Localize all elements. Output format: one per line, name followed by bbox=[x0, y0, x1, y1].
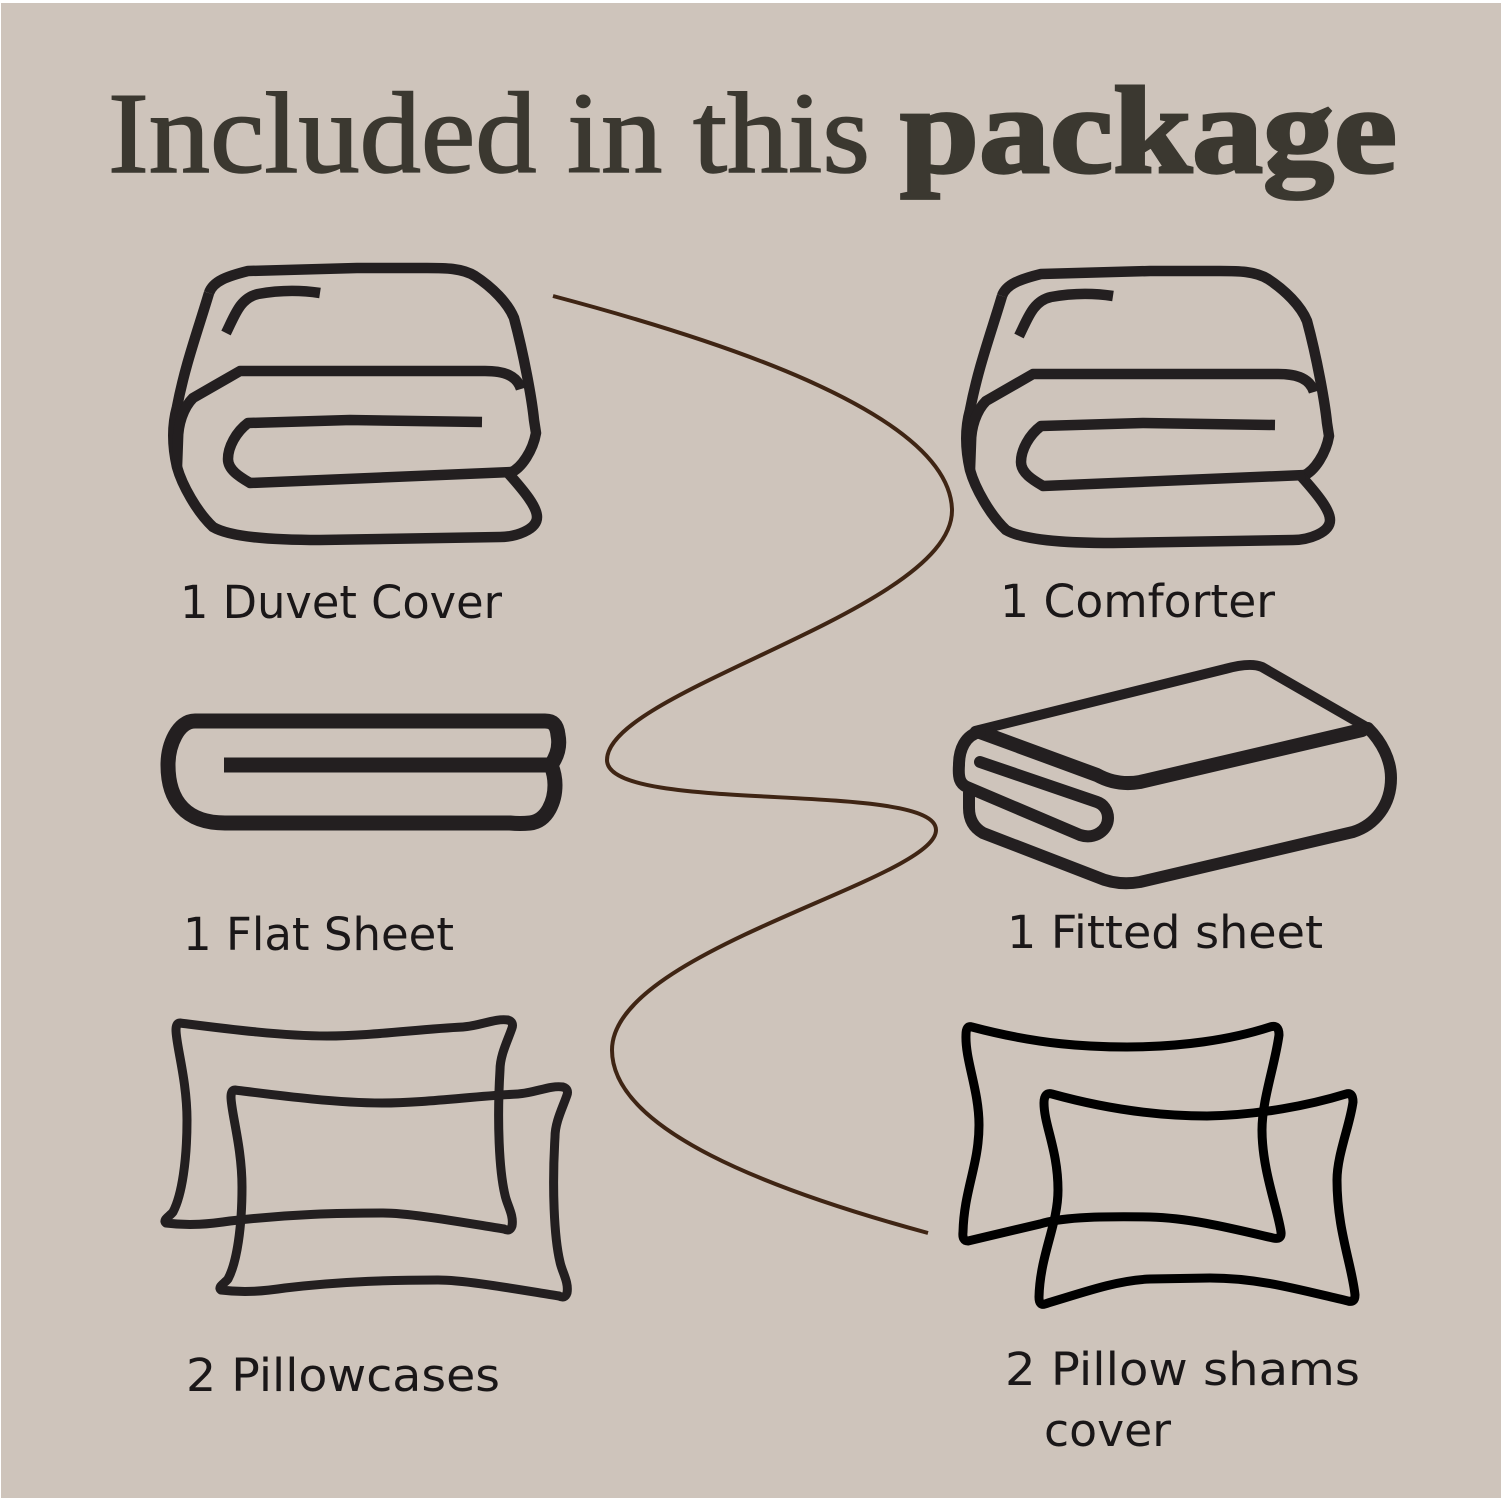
icon: pillow shams bbox=[963, 1026, 1355, 1304]
icon: fitted sheet bbox=[959, 665, 1391, 883]
title: Included in this bbox=[108, 70, 870, 198]
label: fitted sheet: 1 Fitted sheet bbox=[1007, 906, 1323, 959]
title bbox=[108, 62, 1397, 200]
label: pillow shams cover: cover bbox=[1044, 1404, 1172, 1457]
label: pillowcases: 2 Pillowcases bbox=[186, 1349, 500, 1402]
icon: duvet cover bbox=[173, 268, 537, 540]
icon: pillowcases bbox=[165, 1020, 567, 1297]
label: pillow shams cover bbox=[1005, 1343, 1360, 1457]
label: pillow shams cover: 2 Pillow shams bbox=[1005, 1343, 1360, 1396]
icon: comforter bbox=[966, 271, 1330, 543]
icon: flat sheet bbox=[168, 721, 559, 824]
title: package bbox=[900, 62, 1397, 200]
label: duvet cover: 1 Duvet Cover bbox=[180, 576, 502, 629]
label: flat sheet: 1 Flat Sheet bbox=[183, 908, 454, 961]
connector curve bbox=[553, 296, 952, 1233]
label: comforter: 1 Comforter bbox=[1000, 575, 1275, 628]
